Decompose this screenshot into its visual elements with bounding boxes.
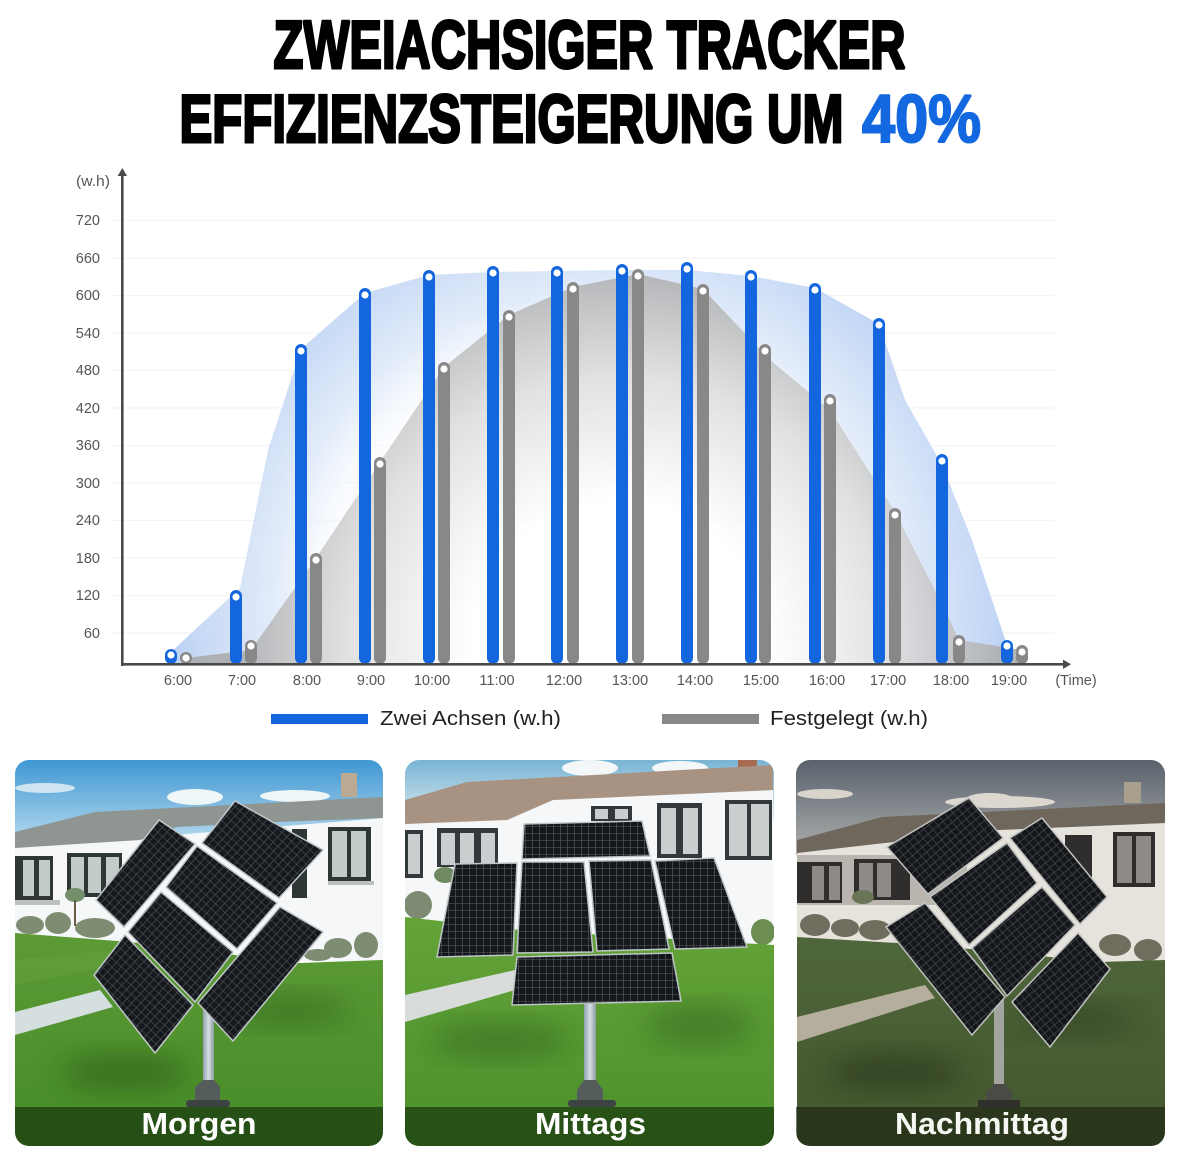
caption: Morgen xyxy=(142,1106,256,1141)
y axis labels: 180 xyxy=(76,551,100,567)
x axis labels: 10:00 xyxy=(414,673,450,689)
y axis labels: 480 xyxy=(76,363,100,379)
y axis labels xyxy=(76,174,110,642)
title xyxy=(180,7,981,157)
x axis labels: 14:00 xyxy=(677,673,713,689)
pole xyxy=(568,1004,616,1107)
caption xyxy=(796,1106,1165,1146)
caption: Nachmittag xyxy=(895,1106,1069,1141)
y axis labels: 660 xyxy=(76,251,100,267)
y axis labels: 300 xyxy=(76,476,100,492)
solar panel array xyxy=(94,801,323,1053)
bars: fixed series xyxy=(180,269,1028,664)
x axis labels: 12:00 xyxy=(546,673,582,689)
area: two axis curve xyxy=(171,270,1007,664)
caption xyxy=(405,1106,774,1146)
legend xyxy=(271,708,928,730)
y axis labels: 600 xyxy=(76,288,100,304)
x axis labels: (Time) xyxy=(1055,673,1097,689)
pole xyxy=(186,1000,230,1107)
y axis labels: 360 xyxy=(76,438,100,454)
y axis labels: (w.h) xyxy=(76,174,110,190)
y axis labels: 60 xyxy=(84,626,100,642)
x axis labels: 19:00 xyxy=(991,673,1027,689)
panel: morning photo xyxy=(15,760,383,1146)
x axis labels: 13:00 xyxy=(612,673,648,689)
panel: afternoon photo xyxy=(796,760,1165,1146)
axes with arrows xyxy=(118,168,1071,669)
pole xyxy=(978,1000,1020,1107)
y axis labels: 540 xyxy=(76,326,100,342)
solar panel array xyxy=(437,821,747,1005)
x axis labels: 16:00 xyxy=(809,673,845,689)
x axis labels: 7:00 xyxy=(228,673,256,689)
caption: Mittags xyxy=(535,1106,646,1141)
y axis labels: 720 xyxy=(76,213,100,229)
y axis labels: 420 xyxy=(76,401,100,417)
x axis labels: 11:00 xyxy=(479,673,515,689)
caption xyxy=(15,1106,383,1146)
x axis labels xyxy=(164,673,1097,689)
x axis labels: 15:00 xyxy=(743,673,779,689)
title line 1: ZWEIACHSIGER TRACKER xyxy=(274,7,906,83)
bars: two axis series xyxy=(165,262,1013,664)
x axis labels: 18:00 xyxy=(933,673,969,689)
x axis labels: 9:00 xyxy=(357,673,385,689)
solar panel array xyxy=(886,798,1110,1047)
legend: Zwei Achsen (w.h) xyxy=(380,708,561,730)
bar end markers xyxy=(167,265,1026,662)
x axis labels: 17:00 xyxy=(870,673,906,689)
title line 2: EFFIZIENZSTEIGERUNG UM xyxy=(180,81,844,157)
highlighted 40 percent: 40% xyxy=(862,81,981,157)
x axis labels: 8:00 xyxy=(293,673,321,689)
area: fixed curve xyxy=(186,274,1022,664)
y axis labels: 120 xyxy=(76,588,100,604)
y axis labels: 240 xyxy=(76,513,100,529)
panel: noon photo xyxy=(404,760,775,1146)
x axis labels: 6:00 xyxy=(164,673,192,689)
legend: Festgelegt (w.h) xyxy=(770,708,928,730)
chart: output by hour xyxy=(76,168,1097,689)
